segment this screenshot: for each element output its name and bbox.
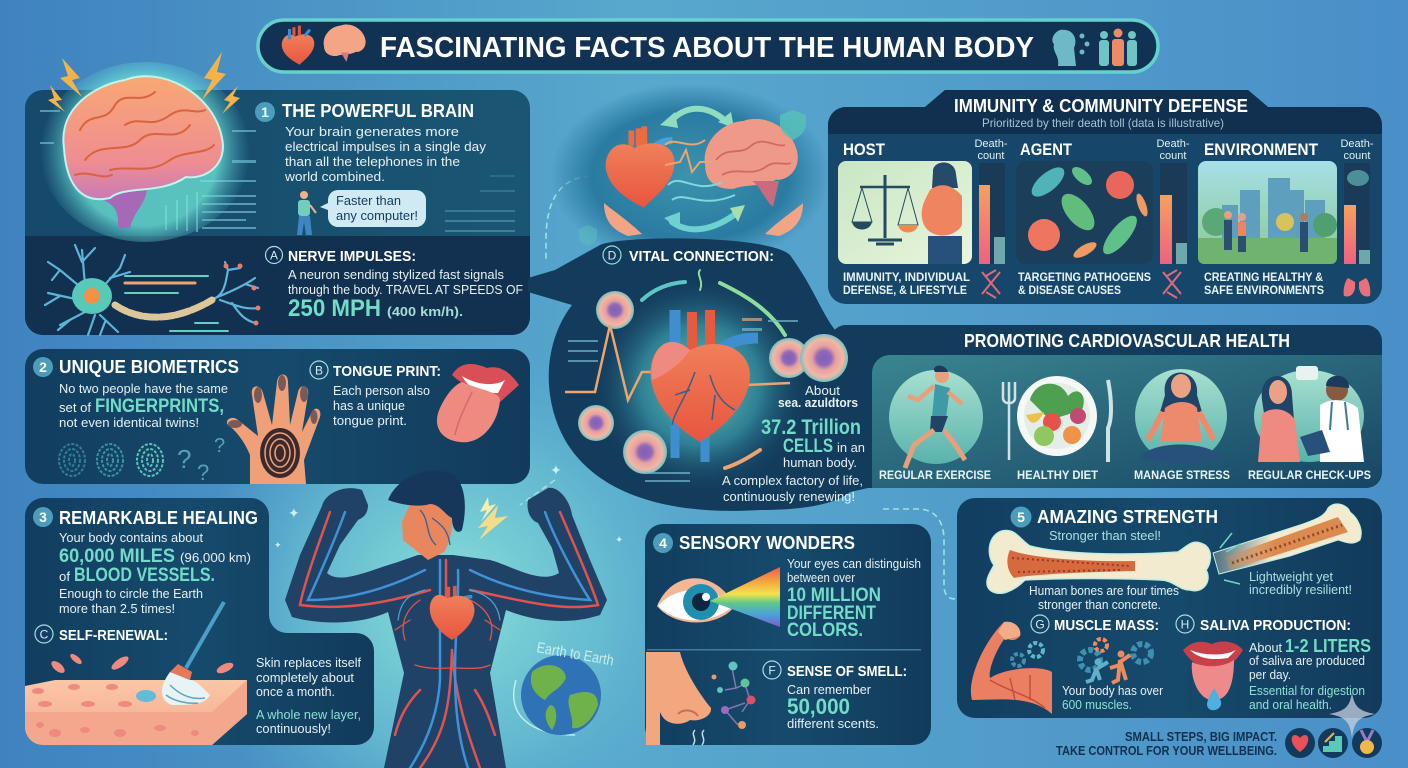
eye text: 10 MILLION	[787, 585, 881, 606]
panel: 4 sensory wonders	[645, 524, 931, 745]
body text: world combined.	[284, 169, 385, 184]
title text: FASCINATING FACTS ABOUT THE HUMAN BODY	[380, 32, 1034, 64]
number badge 4	[653, 533, 673, 553]
nerve text: through the body. TRAVEL AT SPEEDS OF	[288, 282, 523, 297]
stat: 250 mph	[288, 295, 463, 322]
heading: sensory wonders: SENSORY WONDERS	[679, 533, 855, 553]
icon: hand	[227, 374, 320, 484]
death-count label: count	[1160, 150, 1186, 162]
icon: footer heart	[1285, 728, 1315, 758]
smell text	[787, 682, 879, 731]
footer tagline: TAKE CONTROL FOR YOUR WELLBEING.	[1056, 743, 1277, 758]
tongue text: has a unique	[333, 398, 405, 413]
death-count label: Death-	[974, 138, 1008, 150]
sparkles: ✦	[615, 535, 623, 546]
letter badge D	[603, 246, 621, 264]
number badge 5	[1010, 506, 1032, 528]
icon: gears and figures	[1012, 639, 1151, 683]
icon: lightweight bone	[1213, 504, 1361, 584]
panel: 5 amazing strength	[957, 498, 1382, 718]
healing text: of	[59, 569, 70, 584]
icon: top brain	[705, 119, 798, 207]
saliva text: and oral health.	[1249, 697, 1332, 712]
heading: vital connection: VITAL CONNECTION:	[629, 248, 774, 265]
environment caption	[1204, 270, 1324, 297]
panel: 1 the powerful brain	[25, 52, 530, 335]
tongue text: tongue print.	[333, 413, 407, 428]
healing text: more than 2.5 times!	[59, 601, 175, 616]
skin text	[256, 655, 361, 699]
icon: title heart	[282, 26, 314, 65]
host caption: DEFENSE, & LIFESTYLE	[843, 283, 967, 297]
death-count label	[1156, 138, 1190, 162]
bone callouts: incredibly resilient!	[1249, 582, 1352, 597]
heading: immunity: IMMUNITY & COMMUNITY DEFENSE	[954, 96, 1248, 116]
sparkle watermark	[1329, 692, 1375, 738]
cell stat text: A complex factory of life,	[722, 473, 863, 488]
face	[388, 471, 465, 560]
agent caption	[1018, 270, 1151, 297]
icon: eye with rainbow	[657, 567, 780, 627]
sparkles	[274, 462, 623, 550]
cell stat text: continuously renewing!	[723, 489, 855, 504]
number badge 2: 2	[39, 359, 47, 375]
tongue text	[333, 383, 430, 428]
icon: earth globe	[514, 639, 615, 735]
heading: muscle mass: MUSCLE MASS:	[1054, 617, 1159, 634]
biometrics text	[59, 381, 228, 430]
illustration: city	[1198, 161, 1337, 264]
column: agent: AGENT	[1020, 140, 1073, 159]
arteries and veins	[300, 512, 598, 768]
smell text: Can remember	[787, 682, 872, 697]
icon: footer medal	[1352, 728, 1382, 758]
label: REGULAR CHECK-UPS	[1248, 468, 1371, 482]
bone callouts: Stronger than steel!	[1049, 528, 1161, 543]
skin text: completely about	[256, 670, 354, 685]
icon: host crossed bones	[982, 270, 1000, 298]
icon: neuron	[45, 245, 260, 335]
letter badge H: H	[1181, 618, 1189, 632]
number badge 1: 1	[261, 104, 269, 120]
icon: title head silhouette	[1052, 30, 1090, 66]
skin callout: A whole new layer,	[256, 707, 361, 722]
eye text: COLORS.	[787, 620, 863, 641]
label: HEALTHY DIET	[1017, 468, 1099, 482]
biometrics text: not even identical twins!	[59, 415, 199, 430]
letter badge A: A	[270, 248, 278, 262]
eye text: between over	[787, 570, 856, 585]
illustration: human figure with circulatory system	[274, 462, 623, 768]
panel: promoting cardiovascular health	[830, 325, 1382, 488]
icon: mouth with drop	[1183, 642, 1243, 710]
bone callouts: Human bones are four times	[1029, 583, 1179, 598]
cell stat text	[722, 383, 865, 504]
icon: body heart	[430, 586, 474, 640]
death-count label: Death-	[1340, 138, 1374, 150]
heading: promoting: PROMOTING CARDIOVASCULAR HEALTH	[964, 331, 1290, 351]
cell stat text: 37.2 Trillion	[761, 416, 861, 439]
icon: caring hands	[604, 203, 803, 236]
letter badge A	[266, 246, 282, 264]
agent caption: & DISEASE CAUSES	[1018, 283, 1121, 297]
question marks	[177, 435, 225, 485]
letter badge B	[310, 361, 328, 379]
icon: big heart	[651, 310, 758, 462]
dashed connector lines	[520, 176, 956, 599]
bone callouts: Lightweight yet	[1249, 569, 1333, 584]
death-count label	[974, 138, 1008, 162]
icon: tongue	[437, 364, 519, 442]
saliva text: of saliva are produced	[1249, 653, 1365, 668]
icon: regular check-ups	[1254, 366, 1364, 462]
death-count label: count	[978, 150, 1004, 162]
skin text: once a month.	[256, 684, 335, 699]
sparkles: ✦	[550, 462, 562, 478]
heading: self-renewal: SELF-RENEWAL:	[59, 627, 168, 644]
icon: scent molecule	[712, 662, 756, 729]
icon: healthy diet	[1003, 376, 1111, 462]
cell stat text: in an	[837, 440, 865, 455]
stat: 250 mph: 250 MPH	[288, 295, 381, 322]
death-count label: Death-	[1156, 138, 1190, 150]
nerve text	[288, 267, 523, 297]
environment caption: SAFE ENVIRONMENTS	[1204, 283, 1324, 297]
nerve text: A neuron sending stylized fast signals	[288, 267, 504, 282]
icon: lightning sparks	[478, 497, 508, 540]
letter badge C: C	[40, 628, 49, 642]
eye text: Your eyes can distinguish	[787, 556, 921, 571]
label: MANAGE STRESS	[1134, 468, 1230, 482]
icon: cycle arrows	[642, 270, 785, 468]
heading: saliva production: SALIVA PRODUCTION:	[1200, 617, 1351, 634]
host caption	[843, 270, 970, 297]
footer tagline	[1056, 729, 1277, 758]
healing text: 60,000 MILES	[59, 546, 175, 567]
cell stat text: About	[805, 383, 840, 398]
icon: fingerprints	[59, 444, 163, 476]
number badge 1	[255, 102, 275, 122]
icon: manage stress	[1135, 369, 1227, 463]
number badge 5: 5	[1017, 509, 1025, 525]
label: earth to earth: Earth to Earth	[535, 639, 615, 669]
sparkles: ✦	[274, 540, 282, 550]
icon: lightning bolts	[48, 52, 240, 114]
muscle text: 600 muscles.	[1062, 697, 1132, 712]
icon: lungs	[1344, 274, 1370, 297]
question marks: ?	[214, 435, 225, 457]
biometrics text: FINGERPRINTS,	[95, 396, 224, 417]
icon: shields	[579, 110, 806, 246]
death-count label	[1340, 138, 1374, 162]
muscle text	[1062, 683, 1164, 712]
smell text: different scents.	[787, 716, 879, 731]
heading: remarkable healing: REMARKABLE HEALING	[59, 508, 258, 528]
column: environment	[1198, 138, 1374, 297]
sparkles: ✦	[288, 505, 300, 521]
chart: host bars	[979, 163, 1005, 264]
question marks: ?	[197, 460, 209, 485]
eye text: DIFFERENT	[787, 603, 876, 624]
letter badge G: G	[1035, 618, 1045, 632]
number badge 4: 4	[659, 535, 667, 551]
tongue text: Each person also	[333, 383, 430, 398]
icon: footer stairs	[1318, 728, 1348, 758]
subtitle: Prioritized by their death toll (data is illustrative)	[982, 116, 1224, 130]
cell stat text: human body.	[783, 455, 857, 470]
faint data text	[568, 318, 798, 482]
icon: bone	[987, 531, 1210, 593]
icon: title brain	[324, 24, 366, 62]
environment caption: CREATING HEALTHY &	[1204, 270, 1323, 284]
body text: Your brain generates more	[285, 124, 459, 139]
letter badge G	[1031, 615, 1049, 633]
illustration: host	[838, 161, 972, 264]
icon: agent crossed bones	[1163, 270, 1181, 298]
icon: signal waves	[665, 140, 735, 201]
panel: 2 unique biometrics	[25, 349, 530, 485]
speech bubble: any computer!	[336, 208, 418, 223]
illustration: pathogens	[1016, 161, 1153, 264]
icon: person	[297, 191, 316, 235]
icon: title people	[1099, 28, 1137, 66]
letter badge H	[1176, 615, 1194, 633]
icon: ekg line	[565, 325, 790, 400]
saliva text: Essential for digestion	[1249, 683, 1365, 698]
icon: regular exercise	[889, 366, 983, 468]
eye text	[787, 556, 921, 641]
heading: tongue print: TONGUE PRINT:	[333, 363, 441, 380]
biometrics text: No two people have the same	[59, 381, 228, 396]
icon: top heart	[606, 126, 675, 208]
icon: nose	[646, 652, 711, 745]
letter badge F: F	[768, 664, 776, 678]
heading: unique biometrics: UNIQUE BIOMETRICS	[59, 357, 239, 377]
icon: top arrows	[670, 109, 738, 229]
bone callouts: stronger than concrete.	[1038, 597, 1161, 612]
column: environment: ENVIRONMENT	[1204, 140, 1319, 159]
smell text: 50,000	[787, 694, 850, 719]
stat: 250 mph: (400 km/h).	[387, 304, 463, 319]
heading: nerve impulses: NERVE IMPULSES:	[288, 248, 416, 265]
question marks: ?	[177, 444, 191, 474]
skin text: Skin replaces itself	[256, 655, 361, 670]
healing text: (96,000 km)	[180, 550, 251, 565]
letter badge D: D	[608, 248, 617, 262]
saliva text	[1249, 636, 1371, 712]
healing text	[59, 530, 251, 616]
letter badge B: B	[315, 364, 323, 378]
speech bubble: Faster than	[336, 193, 401, 208]
body text: electrical impulses in a single day	[285, 139, 487, 154]
label: REGULAR EXERCISE	[879, 468, 991, 482]
muscle text: Your body has over	[1062, 683, 1164, 698]
column: host: HOST	[843, 140, 886, 159]
saliva text: 1-2 LITERS	[1285, 636, 1371, 656]
host caption: IMMUNITY, INDIVIDUAL	[843, 270, 970, 284]
healing text: BLOOD VESSELS.	[74, 565, 215, 586]
panel: immunity and community defense	[828, 90, 1382, 304]
biometrics text: set of	[59, 400, 91, 415]
heading: amazing strength: AMAZING STRENGTH	[1037, 507, 1218, 527]
letter badge F	[763, 661, 781, 679]
skin callout: continuously!	[256, 721, 331, 736]
speech bubble	[320, 190, 426, 227]
panel: 3 remarkable healing	[25, 498, 374, 745]
number badge 3: 3	[39, 509, 47, 525]
chart: agent bars	[1160, 163, 1187, 264]
icon: brain	[40, 62, 250, 242]
icon: skin layer with mop	[25, 602, 247, 745]
agent caption: TARGETING PATHOGENS	[1018, 270, 1151, 284]
bone callouts	[1029, 528, 1352, 612]
column: host	[838, 138, 1008, 298]
title banner	[258, 20, 1158, 72]
letter badge C	[35, 625, 53, 643]
healing text: Enough to circle the Earth	[59, 586, 203, 601]
cell stat text: sea. azuldtors	[778, 395, 858, 410]
central blob: vital connection	[528, 83, 868, 511]
number badge 3	[33, 507, 53, 527]
chart: environment bars	[1344, 163, 1370, 264]
icon: cells	[578, 291, 848, 474]
brain data decoration	[40, 110, 515, 232]
body text: than all the telephones in the	[285, 154, 460, 169]
heading: the powerful brain: THE POWERFUL BRAIN	[282, 101, 474, 121]
healing text: Your body contains about	[59, 530, 203, 545]
death-count label: count	[1344, 150, 1370, 162]
body text	[284, 124, 487, 184]
number badge 2	[33, 357, 53, 377]
cell stat text: CELLS	[783, 436, 833, 457]
column: agent	[1016, 138, 1190, 298]
saliva text: About	[1249, 640, 1282, 655]
saliva text: per day.	[1249, 667, 1291, 682]
icon: flexed arm	[971, 622, 1052, 714]
heading: sense of smell: SENSE OF SMELL:	[787, 663, 907, 680]
footer tagline: SMALL STEPS, BIG IMPACT.	[1125, 729, 1277, 744]
skin callout	[256, 707, 361, 736]
